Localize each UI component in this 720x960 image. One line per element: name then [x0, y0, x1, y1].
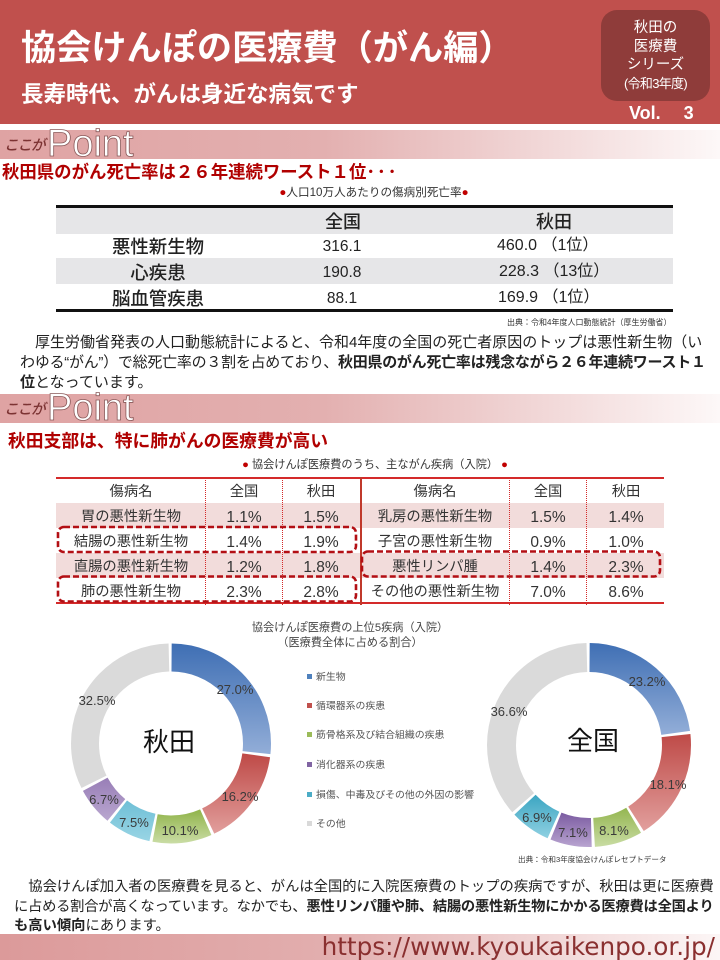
point label — [4, 123, 134, 165]
donut: Akita: 7.5% — [119, 815, 149, 830]
table: mortality rate — [56, 205, 673, 312]
body text 1: わゆる“がん”）で総死亡率の３割を占めており、秋田県のがん死亡率は残念ながら２６年連続ワースト１ — [20, 354, 706, 371]
donut: Akita: 16.2% — [222, 789, 259, 804]
table: cancer costs: 1.2% — [226, 559, 262, 576]
table: mortality rate: 悪性新生物 — [112, 236, 204, 257]
donut: Akita: 6.7% — [89, 792, 119, 807]
body text 2: に占める割合が高くなっています。なかでも、悪性リンパ腫や肺、結腸の悪性新生物にかかる医療費は全国より — [14, 899, 714, 915]
donut: Akita — [79, 658, 259, 838]
table: cancer costs: 傷病名 — [110, 484, 152, 500]
donut: Akita: 秋田 — [143, 727, 195, 757]
body text 1: 厚生労働省発表の人口動態統計によると、令和4年度の全国の死亡者原因のトップは悪性新生物（い — [35, 334, 702, 351]
table: mortality rate: 190.8 — [323, 264, 361, 281]
donut: Akita: 32.5% — [79, 693, 116, 708]
point band 2 — [0, 394, 720, 423]
table: mortality rate: 169.9 （1位） — [498, 289, 599, 306]
donut: National: 8.1% — [599, 823, 629, 838]
point label: Point — [47, 387, 134, 429]
table: cancer costs: 全国 — [230, 484, 258, 500]
table: cancer costs: 子宮の悪性新生物 — [378, 534, 492, 550]
chart legend: 消化器系の疾患 — [316, 760, 385, 771]
donut: National — [491, 658, 687, 840]
donut: National: 23.2% — [629, 674, 666, 689]
title: 協会けんぽの医療費（がん編） — [21, 29, 514, 68]
table: cancer costs: 傷病名 — [414, 484, 456, 500]
table: cancer costs: 悪性リンパ腫 — [392, 559, 478, 575]
table: cancer costs: 7.0% — [530, 584, 566, 601]
chart legend: その他 — [316, 819, 346, 830]
table caption 1: ●人口10万人あたりの傷病別死亡率● — [279, 186, 469, 199]
table: cancer costs: 1.5% — [303, 509, 339, 526]
table: cancer costs: 2.8% — [303, 584, 339, 601]
table: mortality rate: 228.3 （13位） — [499, 263, 609, 280]
chart legend: 新生物 — [316, 672, 346, 683]
table: cancer costs: 1.4% — [608, 509, 644, 526]
table: cancer costs: 1.8% — [303, 559, 339, 576]
point label: Point — [47, 123, 134, 165]
series badge: 医療費 — [634, 38, 677, 54]
series badge: シリーズ — [627, 57, 684, 73]
table: cancer costs: 1.4% — [226, 534, 262, 551]
table: cancer costs: 1.0% — [608, 534, 644, 551]
donut: National: 6.9% — [522, 810, 552, 825]
chart title: 協会けんぽ医療費の上位5疾病（入院） — [252, 622, 448, 634]
body text 1: 位となっています。 — [20, 374, 152, 391]
table: cancer costs: 1.4% — [530, 559, 566, 576]
volume number: Vol. 3 — [629, 103, 694, 123]
shaded row — [56, 258, 673, 284]
table: mortality rate: 秋田 — [536, 212, 572, 232]
series badge: (令和3年度) — [624, 76, 687, 90]
table: cancer costs: 2.3% — [608, 559, 644, 576]
chart legend: 損傷、中毒及びその他の外因の影響 — [316, 790, 474, 801]
chart legend: 循環器系の疾患 — [316, 701, 385, 712]
table: cancer costs — [56, 477, 664, 605]
table: mortality rate: 心疾患 — [130, 262, 186, 283]
footer band — [0, 934, 720, 960]
table: cancer costs: 全国 — [534, 484, 562, 500]
point band 1 — [0, 130, 720, 159]
table: cancer costs: 秋田 — [612, 484, 640, 500]
source note 2: 出典：令和3年度協会けんぽレセプトデータ — [518, 855, 667, 864]
table: cancer costs: 胃の悪性新生物 — [81, 509, 181, 525]
point label: ここが — [4, 138, 44, 154]
bottom rule — [56, 309, 673, 312]
series badge: 秋田の — [634, 20, 677, 36]
donut: Akita: 27.0% — [217, 682, 254, 697]
shaded rows — [56, 503, 664, 528]
donut: Akita: 10.1% — [162, 823, 199, 838]
table caption 2: ● 協会けんぽ医療費のうち、主ながん疾病（入院） ● — [242, 459, 508, 471]
table: cancer costs: 乳房の悪性新生物 — [378, 509, 492, 525]
series badge — [601, 10, 710, 101]
body text 2: も高い傾向にあります。 — [14, 918, 170, 934]
donut: National: 18.1% — [650, 777, 687, 792]
table: cancer costs: 直腸の悪性新生物 — [74, 559, 188, 575]
header row — [56, 205, 673, 234]
source note 1: 出典：令和4年度人口動態統計（厚生労働省） — [507, 318, 671, 327]
table: cancer costs: 肺の悪性新生物 — [81, 584, 181, 600]
table: cancer costs: 1.1% — [226, 509, 262, 526]
donut: National: 全国 — [567, 726, 619, 756]
table: cancer costs: 8.6% — [608, 584, 644, 601]
table: mortality rate: 脳血管疾患 — [112, 288, 204, 309]
chart legend — [307, 672, 474, 830]
point label: ここが — [4, 402, 44, 418]
table: mortality rate: 316.1 — [323, 238, 361, 255]
heading: section 1: 秋田県のがん死亡率は２６年連続ワースト１位･･･ — [2, 162, 398, 182]
donut charts — [71, 643, 691, 847]
table: mortality rate: 88.1 — [327, 290, 357, 307]
table: cancer costs: その他の悪性新生物 — [371, 584, 499, 600]
donut: National: 36.6% — [491, 704, 528, 719]
body text 2 — [14, 878, 714, 934]
table: mortality rate: 全国 — [325, 212, 361, 232]
table: cancer costs: 2.3% — [226, 584, 262, 601]
subtitle: 長寿時代、がんは身近な病気です — [21, 82, 359, 107]
table: mortality rate: 460.0 （1位） — [497, 237, 598, 254]
body text 1 — [20, 334, 706, 391]
donut: National: 7.1% — [558, 825, 588, 840]
dashed highlights — [56, 526, 662, 603]
table: cancer costs: 秋田 — [307, 484, 335, 500]
table: cancer costs: 0.9% — [530, 534, 566, 551]
chart title: （医療費全体に占める割合） — [277, 637, 423, 649]
heading: section 2: 秋田支部は、特に肺がんの医療費が高い — [8, 431, 328, 451]
header banner — [0, 0, 720, 124]
table: cancer costs: 結腸の悪性新生物 — [74, 534, 188, 550]
table: cancer costs: 1.5% — [530, 509, 566, 526]
table: cancer costs: 1.9% — [303, 534, 339, 551]
point label — [4, 387, 134, 429]
body text 2: 協会けんぽ加入者の医療費を見ると、がんは全国的に入院医療費のトップの疾病ですが、秋田は更に医療費 — [28, 879, 714, 895]
chart legend: 筋骨格系及び結合組織の疾患 — [316, 730, 444, 741]
chart title — [252, 621, 448, 649]
